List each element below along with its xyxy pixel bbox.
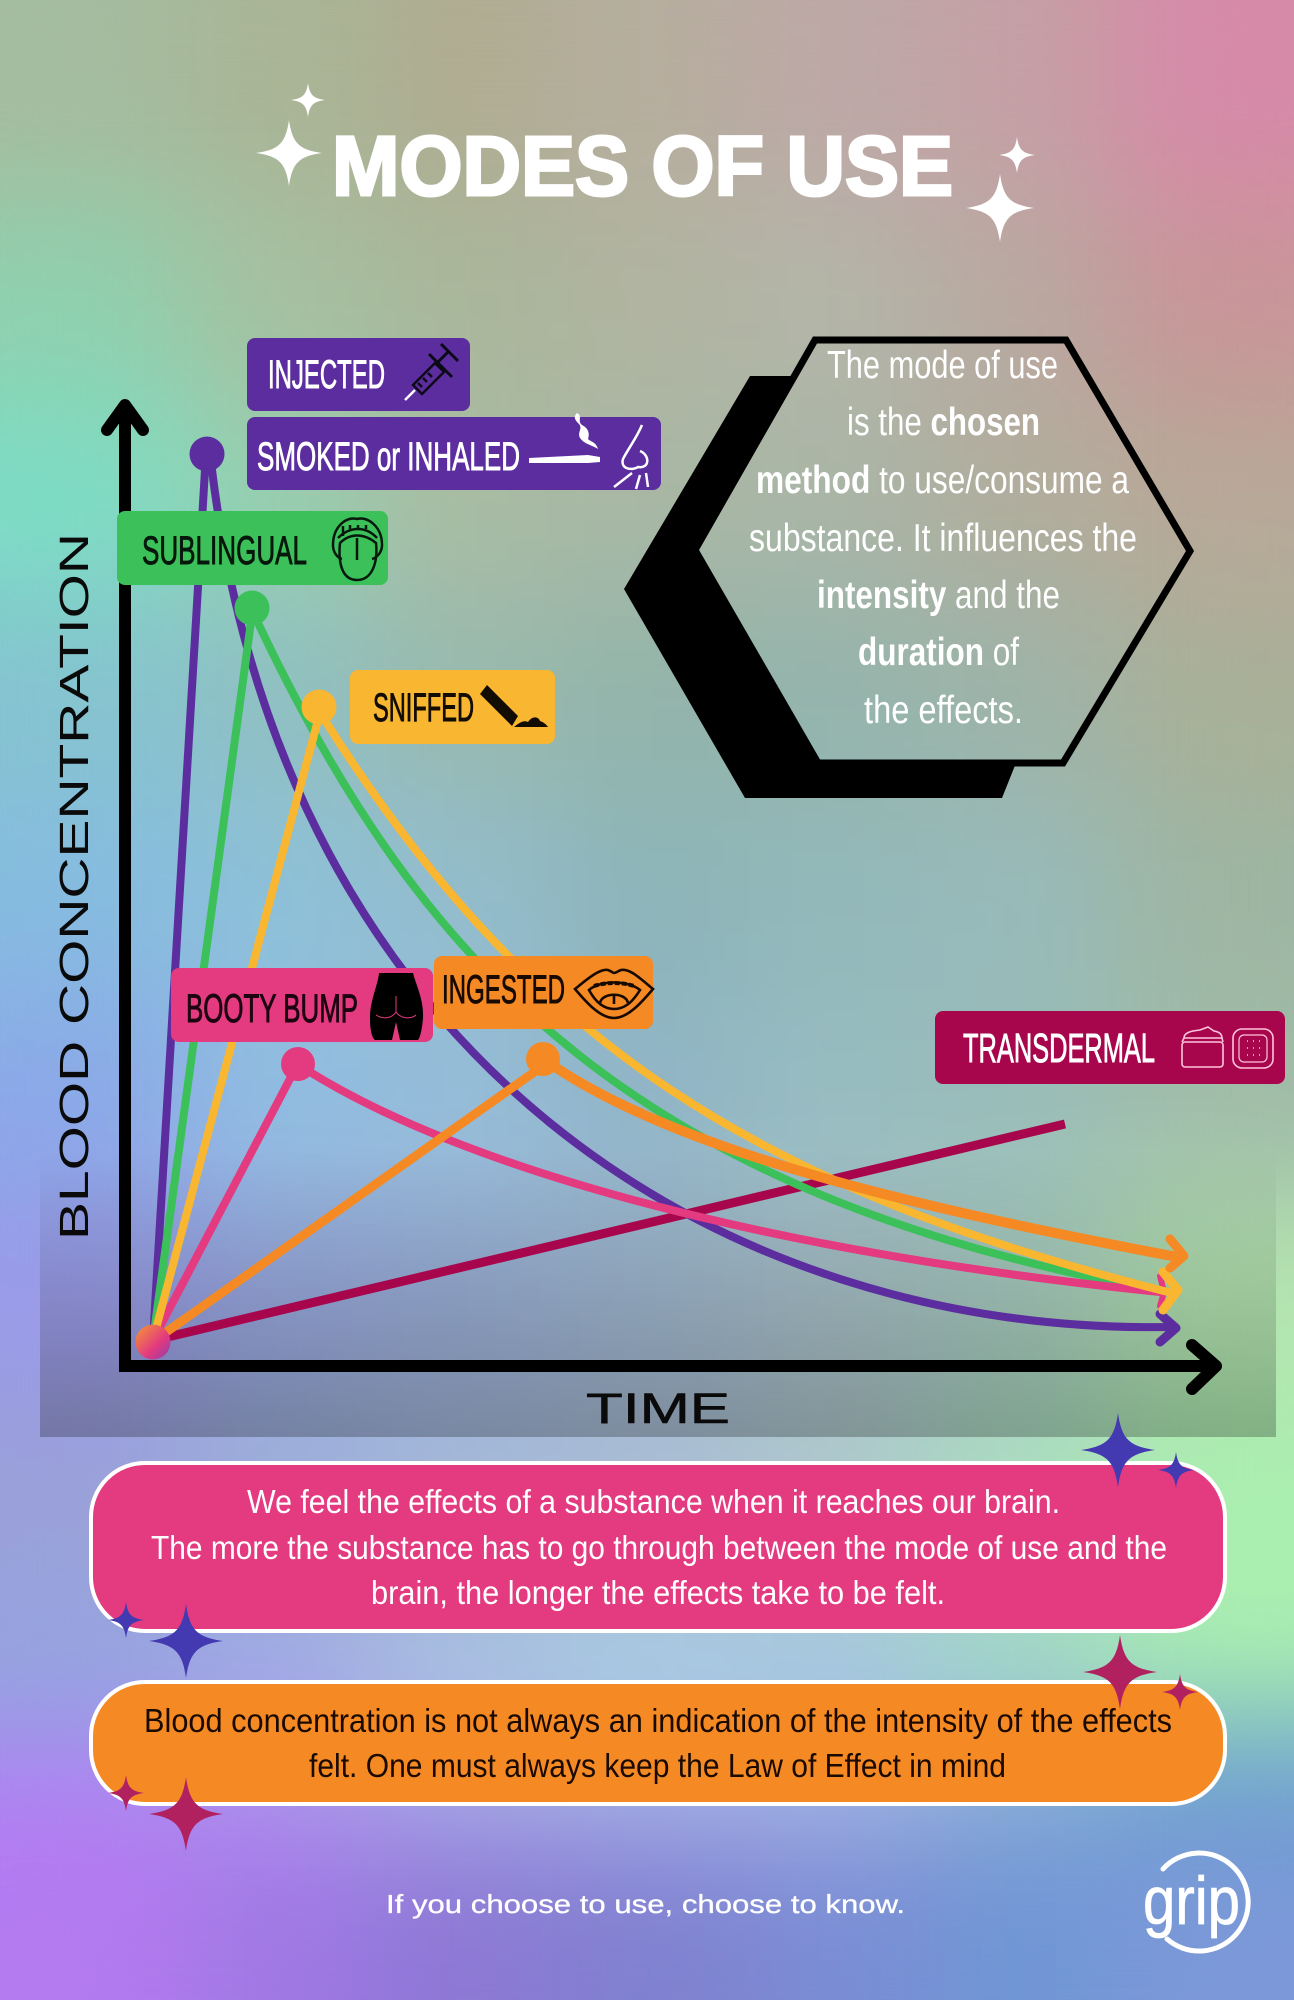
- icon: buttocks: [370, 973, 423, 1040]
- icon: tongue: [333, 518, 382, 580]
- hexagon text: [749, 344, 1137, 732]
- icon: skin patch: [1233, 1029, 1273, 1068]
- label: sniffed: [350, 670, 555, 744]
- icon: open mouth: [575, 970, 653, 1018]
- label: sublingual: SUBLINGUAL: [142, 529, 307, 573]
- icon: syringe: [405, 344, 458, 400]
- axis label: blood concentration: BLOOD CONCENTRATION: [51, 533, 97, 1240]
- info box: law of effect: Blood concentration is not always an indication of the intensity of the effects: [144, 1702, 1172, 1739]
- info box: law of effect: [91, 1682, 1225, 1804]
- hexagon text: The mode of use: [827, 344, 1058, 387]
- label: booty bump: [171, 968, 433, 1042]
- label: sniffed: SNIFFED: [373, 686, 474, 730]
- label: booty bump: BOOTY BUMP: [186, 987, 358, 1031]
- icon: nose: [614, 425, 648, 489]
- axis label: time: TIME: [586, 1385, 730, 1433]
- chart axes: [107, 405, 1216, 1389]
- label: transdermal: [935, 1011, 1285, 1084]
- label: transdermal: TRANSDERMAL: [963, 1025, 1155, 1071]
- hexagon text: substance. It influences the: [749, 517, 1137, 560]
- curve: booty bump: [153, 1072, 1164, 1340]
- peak dots: [136, 436, 560, 1360]
- curve: sniffed: [153, 720, 1178, 1340]
- info box: effects reach brain: [91, 1463, 1225, 1631]
- info box: law of effect: felt. One must always keep the Law of Effect in mind: [309, 1747, 1006, 1784]
- hexagon text: intensity and the: [817, 574, 1060, 617]
- curve: ingested: [155, 1067, 1184, 1340]
- info box: effects reach brain: We feel the effects of a substance when it reaches our brain.: [247, 1483, 1060, 1520]
- label: sublingual: [117, 511, 388, 585]
- label: injected: INJECTED: [268, 353, 385, 397]
- hexagon text: the effects.: [864, 689, 1023, 732]
- label: smoked or inhaled: SMOKED or INHALED: [257, 435, 520, 479]
- info box: effects reach brain: The more the substance has to go through between the mode of use and the: [151, 1529, 1167, 1566]
- label: ingested: [434, 956, 653, 1029]
- icon: joint: [529, 413, 600, 463]
- footer tagline: If you choose to use, choose to know.: [386, 1889, 905, 1919]
- blue sparkles: [108, 1413, 1194, 1678]
- hexagon black shadow: [624, 376, 1016, 798]
- white sparkles around title: [256, 83, 1035, 242]
- grip logo: grip: [1143, 1863, 1240, 1939]
- title: MODES OF USE: [332, 119, 953, 213]
- hexagon outline: [695, 340, 1190, 763]
- crimson sparkles: [108, 1635, 1198, 1851]
- hexagon text: method to use/consume a: [756, 459, 1129, 502]
- icon: cream jar: [1182, 1027, 1223, 1067]
- hexagon text: duration of: [858, 631, 1019, 674]
- info box: effects reach brain: brain, the longer the effects take to be felt.: [371, 1574, 945, 1611]
- hexagon text: is the chosen: [847, 401, 1040, 444]
- label: smoked or inhaled: [247, 413, 661, 490]
- curve: transdermal: [155, 1124, 1065, 1340]
- curve: sublingual: [153, 622, 1160, 1340]
- label: injected: [247, 338, 470, 411]
- chart shaded panel: [40, 1150, 1276, 1437]
- label: ingested: INGESTED: [442, 968, 565, 1012]
- icon: straw and powder: [480, 685, 548, 727]
- hexagon definition callout: [624, 340, 1190, 798]
- curve: injected / smoked: [153, 470, 1176, 1342]
